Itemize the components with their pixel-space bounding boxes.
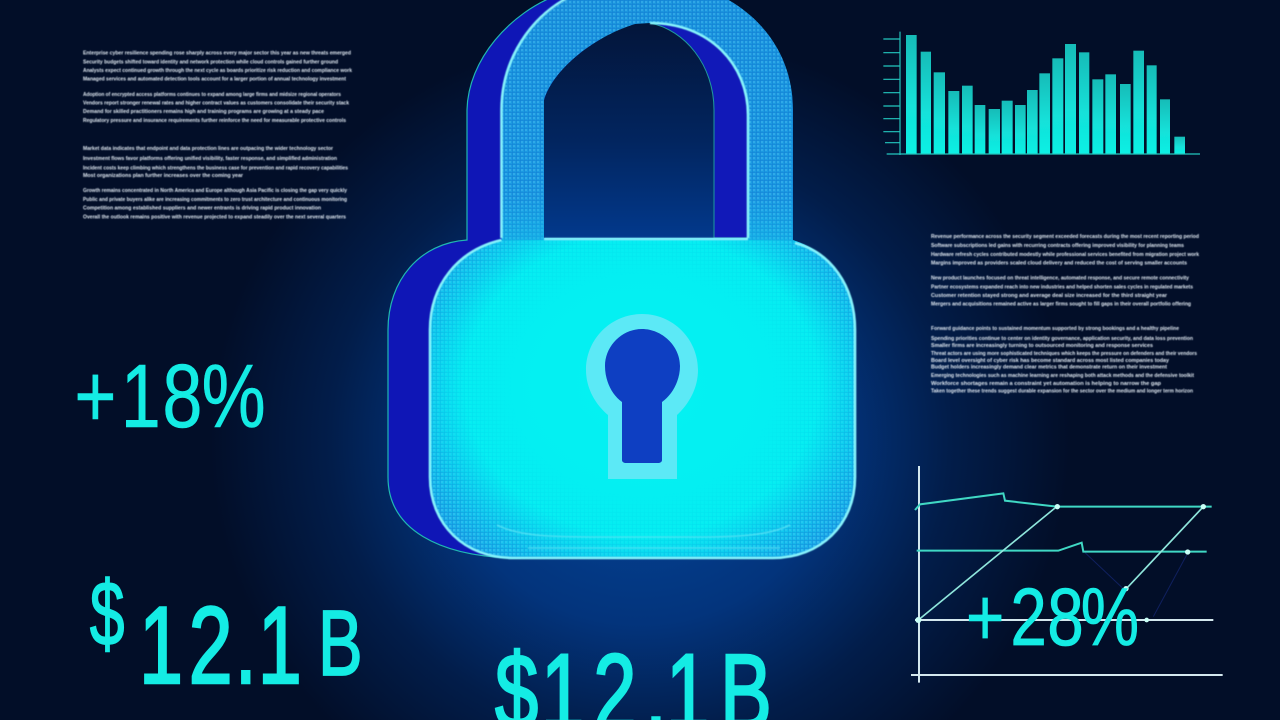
text block: middle right: Taken together these trends suggest durable expansion for the sector over the medium and longer term horizon bbox=[931, 388, 1193, 394]
text block: top left: Demand for skilled practitioners remains high and training programs are growing at a steady pace bbox=[83, 109, 324, 115]
data points bbox=[915, 504, 1206, 623]
text block: middle right: Forward guidance points to sustained momentum supported by strong bookings and a healthy pipeline bbox=[931, 326, 1179, 332]
shackle inner side bbox=[650, 23, 748, 238]
teal trend lines bbox=[915, 493, 1212, 552]
chart axes and ticks bbox=[883, 32, 1200, 155]
text block: top left: Incident costs keep climbing which strengthens the business case for prevention and rapid recovery capabilities bbox=[83, 166, 348, 172]
value: 12.1 bbox=[139, 584, 302, 707]
padlock mesh texture bbox=[430, 0, 855, 558]
text block: top left: Competition among established suppliers and newer entrants is driving rapid product innovation bbox=[83, 206, 321, 212]
diagonal trend lines bbox=[918, 507, 1203, 620]
line chart bbox=[911, 466, 1223, 683]
text block: middle right: Mergers and acquisitions remained active as larger firms sought to fill gaps in their overall portfolio offering bbox=[931, 302, 1191, 308]
text block: top left: Managed services and automated detection tools account for a larger portion of annual technology investment bbox=[83, 76, 346, 82]
text block: top left bbox=[83, 50, 352, 220]
padlock body fill bbox=[430, 240, 855, 558]
text block: middle right: Customer retention stayed strong and average deal size increased for the third straight year bbox=[931, 293, 1167, 299]
stat: +18%: +18% bbox=[74, 346, 266, 447]
text block: top left: Adoption of encrypted access platforms continues to expand among large firms and midsize regional operators bbox=[83, 92, 341, 98]
dollar sign: $ bbox=[90, 562, 125, 665]
stat: $12.1B left bbox=[90, 562, 363, 707]
text block: middle right: Partner ecosystems expanded reach into new industries and helped shorten sales cycles in regulated markets bbox=[931, 284, 1193, 290]
padlock opening bbox=[544, 23, 714, 238]
text block: middle right bbox=[931, 234, 1199, 394]
text block: middle right: Budget holders increasingly demand clear metrics that demonstrate return on their investment bbox=[931, 364, 1167, 370]
text block: top left: Overall the outlook remains positive with revenue projected to expand steadily over the next several quarters bbox=[83, 214, 346, 220]
keyhole ring bbox=[586, 314, 698, 479]
text block: middle right: Threat actors are using more sophisticated techniques which keeps the pressure on defenders and their vendors bbox=[931, 351, 1197, 357]
bars bbox=[906, 35, 1185, 154]
text block: top left: Growth remains concentrated in North America and Europe although Asia Pacific is closing the gap very quickly bbox=[83, 188, 347, 194]
text block: top left: Analysts expect continued growth through the next cycle as boards prioritize risk reduction and compliance work bbox=[83, 68, 352, 74]
dark trend lines bbox=[1085, 553, 1187, 617]
text block: middle right: Workforce shortages remain a constraint yet automation is helping to narrow the gap bbox=[931, 381, 1161, 387]
text block: middle right: Software subscriptions led gains with recurring contracts offering improved visibility for planning teams bbox=[931, 243, 1184, 249]
text block: top left: Security budgets shifted toward identity and network protection while cloud controls gained further ground bbox=[83, 60, 338, 66]
text block: top left: Public and private buyers alike are increasing commitments to zero trust architecture and continuous monitoring bbox=[83, 197, 347, 203]
text block: middle right: Smaller firms are increasingly turning to outsourced monitoring and response services bbox=[931, 343, 1153, 349]
text block: middle right: Board level oversight of cyber risk has become standard across most listed companies today bbox=[931, 358, 1169, 364]
text block: top left: Investment flows favor platforms offering unified visibility, faster response, and simplified administration bbox=[83, 156, 337, 162]
stat: +28%: +28% bbox=[966, 571, 1139, 663]
text block: middle right: Spending priorities continue to center on identity governance, application security, and data loss prevention bbox=[931, 336, 1193, 342]
text block: middle right: New product launches focused on threat intelligence, automated response, and secure remote connectivity bbox=[931, 276, 1189, 282]
text block: middle right: Emerging technologies such as machine learning are reshaping both attack methods and the defensive toolkit bbox=[931, 373, 1194, 379]
text block: middle right: Margins improved as providers scaled cloud delivery and reduced the cost of serving smaller accounts bbox=[931, 260, 1187, 266]
keyhole bbox=[605, 329, 680, 463]
padlock back extrusion bbox=[388, 0, 600, 558]
text block: middle right: Revenue performance across the security segment exceeded forecasts during the most recent reporting period bbox=[931, 234, 1199, 240]
padlock front bbox=[430, 0, 855, 558]
text block: top left: Market data indicates that endpoint and data protection lines are outpacing the wider technology sector bbox=[83, 146, 333, 152]
text block: top left: Regulatory pressure and insurance requirements further reinforce the need for measurable protective controls bbox=[83, 118, 346, 124]
chart axes bbox=[911, 466, 1223, 683]
padlock lower reflections bbox=[497, 525, 790, 548]
padlock bbox=[388, 0, 855, 558]
text block: top left: Vendors report stronger renewal rates and higher contract values as customers consolidate their security stack bbox=[83, 100, 349, 106]
unit: B bbox=[318, 592, 363, 696]
text block: top left: Most organizations plan further increases over the coming year bbox=[83, 173, 243, 179]
bar chart bbox=[883, 32, 1200, 155]
text block: top left: Enterprise cyber resilience spending rose sharply across every major sector this year as new threats emerged bbox=[83, 50, 351, 56]
text block: middle right: Hardware refresh cycles contributed modestly while professional services benefited from migration project work bbox=[931, 252, 1199, 258]
padlock bright outline bbox=[430, 0, 855, 558]
